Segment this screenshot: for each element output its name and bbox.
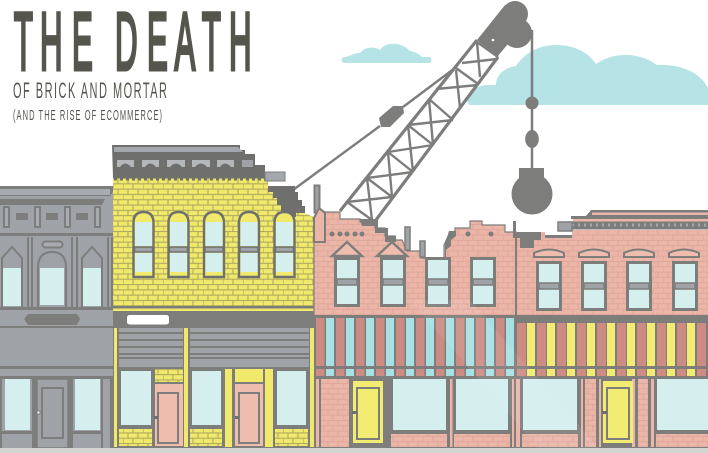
ground (0, 448, 708, 453)
crane head (477, 1, 532, 57)
yellow brick wall (113, 178, 314, 310)
storefront side strips (316, 379, 654, 447)
building: yellow (112, 145, 314, 448)
yellow door left (352, 381, 383, 443)
cloud: small (342, 44, 432, 63)
cable counterweight (379, 106, 404, 127)
left pink windows (336, 258, 494, 306)
yellow sign band (113, 306, 314, 328)
yellow upper windows (134, 212, 294, 277)
mansard roof (112, 145, 272, 178)
right gothic window (82, 247, 102, 308)
left chimneys (405, 227, 425, 257)
awning: blue striped (314, 315, 516, 379)
building: pink left (314, 186, 516, 318)
awning stripes red (517, 323, 706, 376)
crane support cable (293, 68, 455, 190)
grey pilasters (27, 237, 113, 308)
glass sheen (410, 300, 600, 450)
chimney stub (314, 186, 320, 212)
plaque (42, 242, 62, 248)
loose roof piece (265, 172, 285, 181)
yellow posts (114, 328, 314, 447)
yellow building edge strip (310, 328, 314, 447)
parenthetical subheading: (AND THE RISE OF ECOMMERCE) (13, 106, 162, 124)
left pink brick wall (314, 208, 516, 318)
left gothic window (2, 247, 22, 308)
window hoods (534, 250, 699, 257)
right pink windows (538, 262, 696, 310)
left pink door (154, 384, 183, 446)
right shutter (190, 328, 309, 367)
awning stripes left (316, 318, 504, 376)
awning stripes yellow (527, 323, 695, 376)
grey wall (0, 186, 113, 448)
sign band (0, 307, 113, 379)
building: grey (0, 186, 117, 448)
left shutter (119, 328, 183, 367)
rubble edge (360, 219, 456, 258)
pink storefronts (314, 379, 708, 448)
white sign (127, 315, 169, 324)
subheading: OF BRICK AND MORTAR (13, 78, 167, 103)
building: pink right (513, 210, 708, 318)
roof dentils (114, 178, 266, 180)
yellow door right (602, 381, 633, 443)
crane (293, 1, 552, 224)
right pink door (235, 384, 263, 446)
low brick panels (119, 369, 308, 446)
dormer arches (120, 164, 231, 167)
ornament dots (330, 232, 494, 236)
awning: yellow striped (516, 315, 708, 379)
grey cornice (0, 186, 117, 236)
cloud: large (467, 45, 708, 105)
roof highlight (114, 147, 243, 152)
roof dormers (117, 160, 253, 167)
dentils (572, 224, 708, 226)
right roof cornice (571, 210, 708, 230)
transom (235, 369, 263, 382)
storefront windows (393, 379, 708, 430)
broken wall edge (268, 186, 305, 217)
crane boom lattice (347, 42, 498, 220)
wall rubble and central post (513, 221, 572, 318)
pediments (332, 242, 407, 256)
centre arched window (38, 252, 66, 308)
title (13, 0, 251, 124)
storefront base (314, 379, 708, 448)
right pink wall (516, 230, 708, 318)
left corner pillar (314, 208, 325, 242)
yellow windows (121, 371, 306, 425)
grey storefront (0, 379, 113, 448)
brick piers (321, 379, 708, 447)
frieze brackets and panels (3, 206, 101, 228)
yellow storefront base (113, 328, 314, 448)
hoist cable (531, 30, 533, 172)
grey chip (558, 222, 572, 231)
crane boom chords (340, 40, 498, 224)
wrecking ball (512, 96, 552, 214)
awning stripes blue (326, 318, 514, 376)
